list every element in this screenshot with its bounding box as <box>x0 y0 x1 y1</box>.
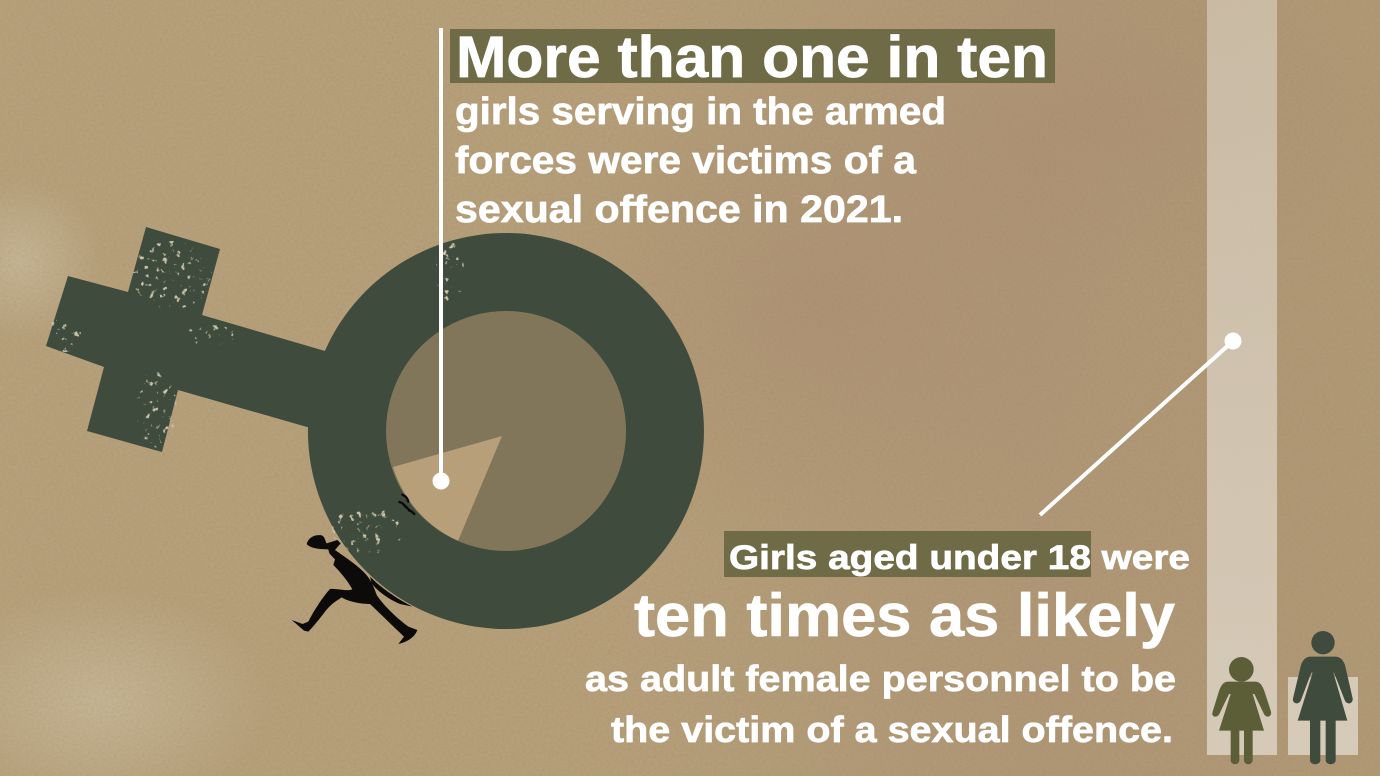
body text: girls serving in the armed <box>455 91 946 133</box>
leader line to bar <box>1040 332 1242 515</box>
lead text: Girls aged under 18 were <box>729 539 1190 577</box>
ring wear speckles <box>332 242 464 554</box>
body text: sexual offence in 2021. <box>455 189 903 231</box>
body text <box>455 91 946 231</box>
callout bottom <box>585 332 1242 750</box>
big statement: ten times as likely <box>634 582 1176 649</box>
symbol cross arm <box>46 227 345 452</box>
bar: adult female personnel <box>1288 677 1358 755</box>
highlight <box>724 531 1091 577</box>
female symbol <box>46 227 704 629</box>
headline: More than one in ten <box>456 25 1048 90</box>
pie wedge: one in ten <box>393 436 502 541</box>
icon: adult woman <box>1293 631 1353 764</box>
body text: as adult female personnel to be <box>585 658 1176 699</box>
bar: girls under 18 <box>1207 0 1277 755</box>
headline highlight <box>450 29 1055 83</box>
running woman silhouette <box>292 495 417 644</box>
leader line to pie wedge <box>432 28 450 490</box>
callout top <box>432 25 1055 490</box>
pale bars <box>1207 0 1358 755</box>
body text: forces were victims of a <box>455 140 917 182</box>
symbol ring <box>308 233 704 629</box>
body text: the victim of a sexual offence. <box>611 709 1173 750</box>
icon: girl <box>1212 657 1271 764</box>
symbol inner disc <box>381 306 631 556</box>
body text <box>585 658 1176 750</box>
